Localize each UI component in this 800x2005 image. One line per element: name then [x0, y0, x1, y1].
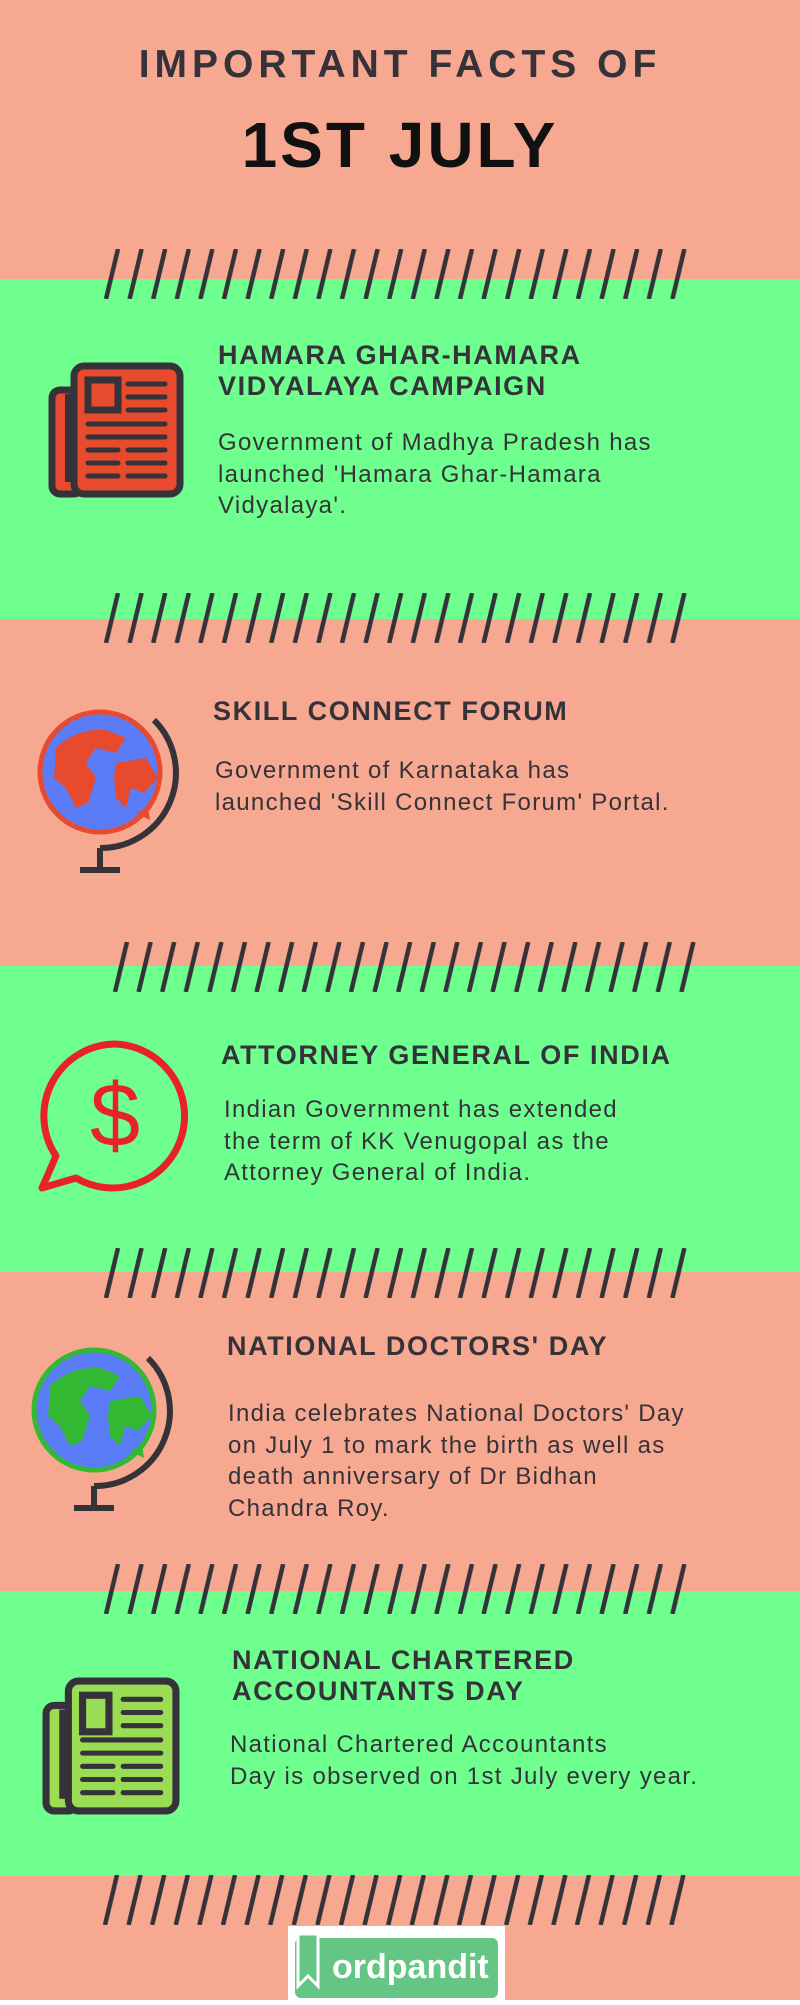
heading: HAMARA GHAR-HAMARA	[218, 340, 582, 370]
divider slashes	[102, 1875, 686, 1925]
icon: globe red	[38, 710, 179, 873]
panel: hamara ghar	[48, 340, 652, 519]
panel: skill connect	[38, 696, 670, 873]
text: Indian Government has extended	[224, 1096, 618, 1123]
divider slashes	[104, 593, 687, 643]
text: Vidyalaya'.	[218, 492, 347, 519]
text	[215, 757, 670, 816]
text: Government of Madhya Pradesh has	[218, 429, 652, 456]
title	[139, 43, 661, 181]
heading: NATIONAL CHARTERED	[232, 1645, 575, 1675]
title: IMPORTANT FACTS OF	[139, 43, 661, 86]
divider slashes	[104, 1564, 687, 1614]
text	[230, 1731, 698, 1790]
icon: dollar bubble: $	[90, 1066, 140, 1166]
heading: NATIONAL DOCTORS' DAY	[227, 1331, 608, 1361]
text: Attorney General of India.	[224, 1159, 531, 1186]
text: launched 'Skill Connect Forum' Portal.	[215, 788, 670, 816]
heading: VIDYALAYA CAMPAIGN	[218, 371, 547, 401]
divider slashes	[104, 1248, 687, 1298]
panel: doctors day	[32, 1331, 685, 1522]
panel: chartered accountants	[42, 1645, 698, 1814]
heading: ATTORNEY GENERAL OF INDIA	[221, 1040, 672, 1070]
icon: newspaper green	[42, 1678, 180, 1814]
text	[224, 1096, 618, 1186]
text: on July 1 to mark the birth as well as	[228, 1432, 666, 1458]
text: National Chartered Accountants	[230, 1731, 608, 1758]
title: 1ST JULY	[242, 109, 558, 181]
panel: attorney general	[38, 1040, 672, 1192]
text: Government of Karnataka has	[215, 757, 570, 784]
text: India celebrates National Doctors' Day	[228, 1400, 685, 1427]
heading: SKILL CONNECT FORUM	[213, 696, 568, 726]
icon: newspaper red	[48, 362, 184, 498]
logo: wordpandit	[288, 1926, 505, 2000]
icon: dollar bubble	[38, 1040, 188, 1192]
text: Chandra Roy.	[228, 1494, 390, 1522]
text: launched 'Hamara Ghar-Hamara	[218, 460, 602, 488]
text: Day is observed on 1st July every year.	[230, 1762, 698, 1790]
text	[228, 1400, 685, 1522]
logo: wordpandit: ordpandit	[332, 1948, 489, 1986]
heading: ACCOUNTANTS DAY	[232, 1676, 525, 1706]
text: death anniversary of Dr Bidhan	[228, 1463, 598, 1490]
divider slashes	[104, 249, 687, 299]
heading	[232, 1645, 575, 1706]
icon: globe green	[32, 1348, 173, 1511]
divider slashes	[112, 942, 696, 992]
text	[218, 429, 652, 519]
heading	[218, 340, 582, 401]
text: the term of KK Venugopal as the	[224, 1128, 610, 1154]
